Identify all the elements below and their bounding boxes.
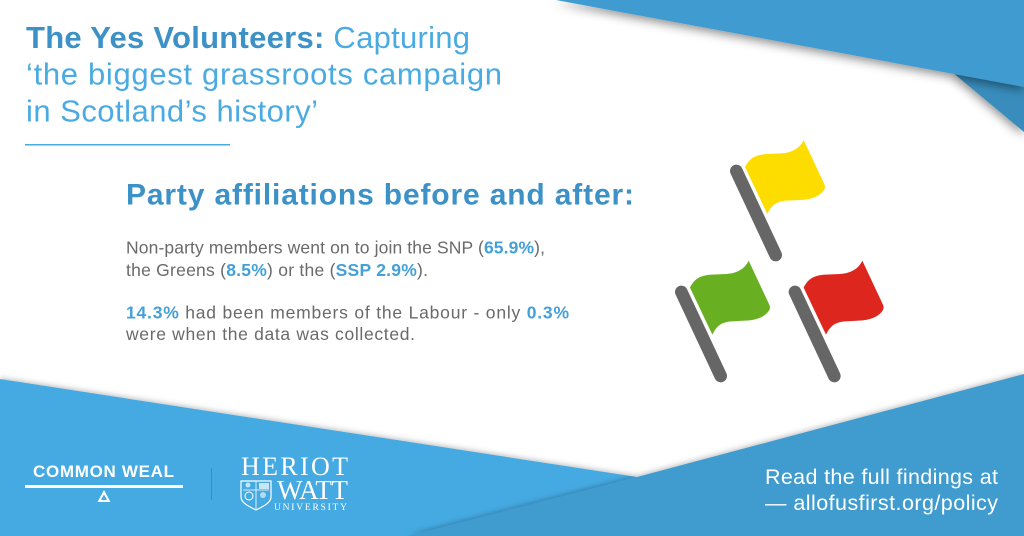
logo: Heriot Watt University: HERIOT [241, 452, 348, 481]
top right dark fold [952, 72, 1024, 132]
logo: Heriot Watt University: WATT [277, 475, 348, 505]
title: in Scotland’s history’ [26, 94, 318, 128]
bottom right darker blue band [408, 374, 1024, 536]
heading: party affiliations: Party affiliations before and after: [126, 178, 634, 212]
title underline [25, 144, 230, 146]
text block: labour members [125, 302, 569, 344]
divider [211, 468, 212, 500]
text block: labour members: 14.3% had been members of the Labour - only 0.3% [126, 302, 569, 322]
icon: university shield [241, 481, 271, 510]
title [26, 20, 502, 128]
logo: Common Weal [25, 462, 183, 502]
logo: Heriot Watt University: UNIVERSITY [274, 503, 347, 513]
call to action: Read the full findings at [765, 465, 998, 489]
icon: red flag [795, 261, 884, 376]
top right blue band [556, 0, 1024, 87]
icon: green flag [681, 261, 770, 376]
call to action [765, 465, 998, 515]
text block: non-party members: Non-party members went on to join the SNP (65.9%), [126, 238, 545, 258]
title: The Yes Volunteers: Capturing [26, 20, 470, 55]
icon: yellow flag [736, 140, 825, 255]
call to action: — allofusfirst.org/policy [765, 491, 998, 515]
logo: Common Weal: COMMON WEAL [33, 462, 174, 481]
text block: non-party members: the Greens (8.5%) or the (SSP 2.9%). [126, 260, 428, 280]
text block: non-party members [126, 238, 545, 280]
logo: Heriot Watt University [241, 452, 348, 513]
title: ‘the biggest grassroots campaign [26, 56, 502, 92]
bottom left light blue band [0, 379, 637, 536]
text block: labour members: were when the data was collected. [125, 324, 415, 344]
